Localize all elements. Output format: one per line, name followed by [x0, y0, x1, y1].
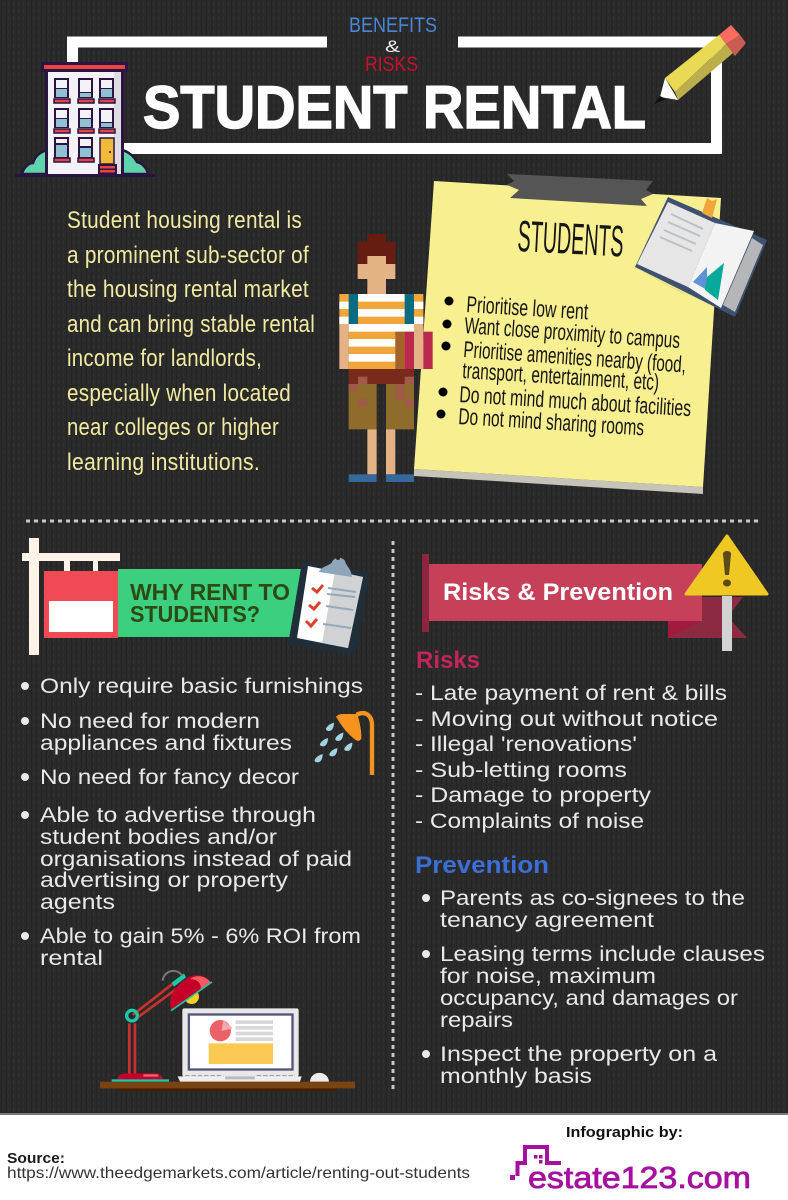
intro text: especially when located	[67, 380, 291, 407]
benefits list: rental	[40, 946, 103, 970]
credit label: Infographic by:	[566, 1124, 683, 1141]
risks list: - Late payment of rent & bills	[415, 681, 727, 705]
intro text: income for landlords,	[67, 345, 262, 372]
prevention list	[422, 886, 765, 1088]
benefits list: Only require basic furnishings	[40, 674, 363, 698]
heading banner	[118, 569, 302, 637]
ribbon banner	[422, 554, 747, 638]
intro text: near colleges or higher	[67, 414, 279, 441]
subtitle: benefits: BENEFITS	[349, 14, 437, 37]
risks list: - Complaints of noise	[415, 809, 644, 833]
prevention list: Inspect the property on a	[440, 1042, 717, 1066]
tape	[507, 174, 653, 206]
heading text	[130, 579, 290, 627]
logo	[510, 1147, 751, 1195]
prevention list: monthly basis	[440, 1064, 592, 1088]
risks list	[415, 681, 727, 833]
panel: why rent to students	[21, 538, 372, 1091]
prevention list: Parents as co-signees to the	[440, 886, 745, 910]
prevention list: occupancy, and damages or	[440, 986, 738, 1010]
prevention list: tenancy agreement	[440, 908, 654, 932]
intro text: the housing rental market	[67, 276, 309, 303]
bullet list: Do not mind sharing rooms	[458, 403, 645, 440]
benefits list: Able to gain 5% - 6% ROI from	[40, 924, 361, 948]
bullet list	[436, 291, 692, 440]
source url: https://www.theedgemarkets.com/article/renting-out-students	[7, 1165, 470, 1182]
icon: real-estate sign	[22, 538, 120, 655]
icon: apartment building	[15, 62, 155, 177]
risks list: - Illegal 'renovations'	[415, 732, 637, 756]
benefits list: advertising or property	[40, 868, 288, 892]
risks list: - Moving out without notice	[415, 707, 718, 731]
panel: students note	[414, 174, 767, 494]
header frame	[72, 42, 716, 148]
icon: pencil	[654, 25, 746, 104]
benefits list: organisations instead of paid	[40, 847, 352, 871]
benefits list: Able to advertise through	[40, 803, 316, 827]
subtitle: risks: RISKS	[365, 53, 418, 76]
illustration: student	[339, 234, 433, 482]
heading text: WHY RENT TO	[130, 579, 290, 605]
risks list: - Damage to property	[415, 783, 651, 807]
prevention list: repairs	[440, 1008, 513, 1032]
icon: warning sign	[686, 536, 767, 651]
title: STUDENT RENTAL	[143, 74, 646, 141]
bullet list: Prioritise low rent	[466, 291, 589, 324]
benefits list: agents	[40, 890, 115, 914]
benefits list: No need for fancy decor	[40, 765, 299, 789]
intro text: Student housing rental is	[67, 207, 302, 234]
bullet list: Want close proximity to campus	[464, 312, 681, 353]
heading text: STUDENTS?	[130, 601, 260, 627]
intro text	[67, 207, 315, 476]
illustration: desk with lamp and laptop	[100, 971, 355, 1091]
intro text: and can bring stable rental	[67, 311, 315, 338]
intro text: learning institutions.	[67, 449, 260, 476]
subtitle: ampersand: &	[385, 37, 401, 56]
benefits list: No need for modern	[40, 709, 260, 733]
sticky note	[414, 181, 721, 494]
prevention list: for noise, maximum	[440, 964, 656, 988]
risks list: - Sub-letting rooms	[415, 758, 627, 782]
benefits list	[21, 674, 363, 970]
prevention heading: Prevention	[415, 852, 549, 879]
panel: risks and prevention	[415, 536, 767, 1088]
benefits list: student bodies and/or	[40, 825, 277, 849]
intro text: a prominent sub-sector of	[67, 242, 309, 269]
header	[15, 14, 746, 177]
icon: open book	[635, 197, 767, 317]
risks heading: Risks	[416, 647, 480, 674]
benefits list: appliances and fixtures	[40, 731, 292, 755]
icon: shower	[315, 713, 372, 775]
bullet list: transport, entertainment, etc)	[462, 357, 660, 395]
logo: estate123.com	[528, 1160, 751, 1195]
source label: Source:	[7, 1150, 65, 1167]
prevention list: Leasing terms include clauses	[440, 942, 765, 966]
banner heading: Risks & Prevention	[443, 579, 673, 606]
panel: students note: STUDENTS	[516, 212, 625, 267]
icon: clipboard	[288, 556, 370, 655]
footer	[0, 1113, 788, 1200]
